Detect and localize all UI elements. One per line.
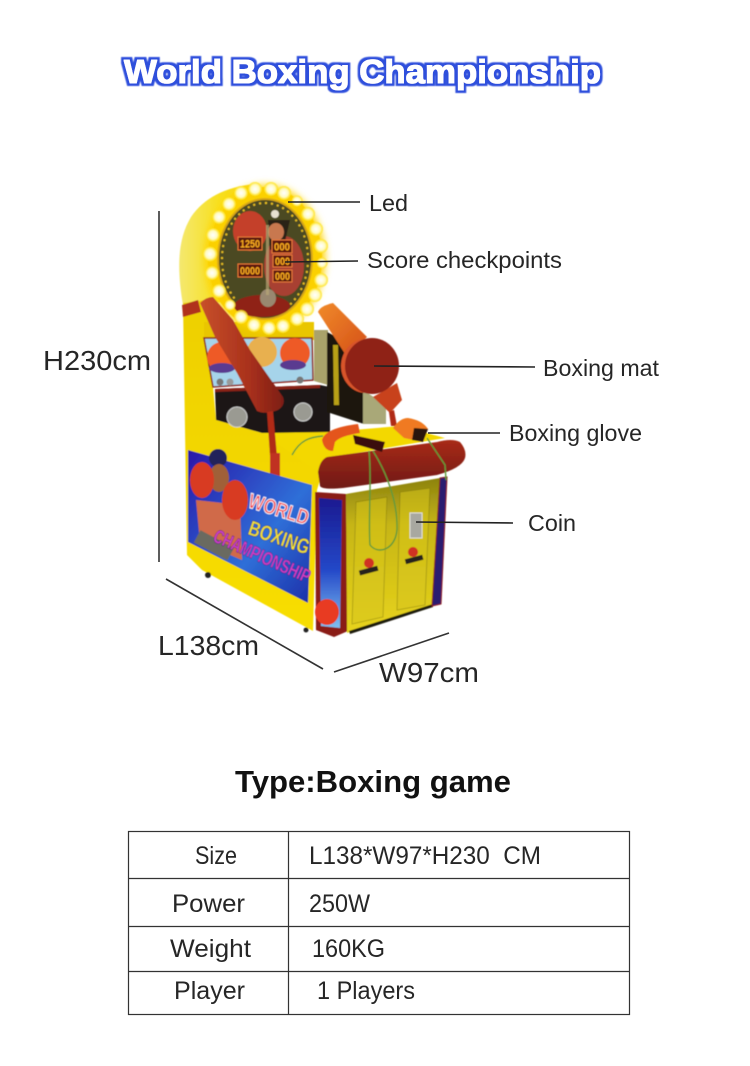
- mesh and dark post: [314, 330, 386, 424]
- light blue screen panel: [204, 337, 313, 387]
- banner wordmark: BOXING: [245, 517, 312, 559]
- right boxing glove: [393, 418, 428, 442]
- banner wordmark: CHAMPIONSHIP: [210, 526, 314, 588]
- row: power: [172, 890, 370, 918]
- green cords: [292, 436, 446, 550]
- upper panel behind screen: [204, 322, 314, 340]
- length dimension line: [166, 579, 323, 669]
- type heading: Type:Boxing game: [235, 764, 511, 799]
- score displays: 000: [275, 271, 290, 283]
- score displays: 000: [275, 256, 290, 268]
- counter top: [262, 426, 445, 472]
- width dimension line: [334, 633, 449, 672]
- row: weight: [170, 935, 385, 963]
- red side bracket: [182, 300, 201, 317]
- pirate boxer: [190, 449, 248, 560]
- length label: L138cm: [158, 630, 259, 661]
- row: player: 1 Players: [317, 977, 415, 1005]
- callout: Boxing glove: Boxing glove: [509, 420, 642, 446]
- left boxing glove: [322, 424, 385, 452]
- LED ring with dial: [202, 182, 328, 335]
- corner column: [315, 492, 348, 637]
- callout: Coin: Coin: [528, 510, 576, 536]
- height label: H230cm: [43, 345, 151, 376]
- boxing mat pad: [341, 338, 399, 394]
- ring glow: [205, 185, 325, 331]
- specification table: [128, 832, 630, 1014]
- banner wordmark: WORLD: [246, 490, 312, 530]
- door emblems: [364, 558, 374, 568]
- score displays: 1250: [240, 238, 260, 250]
- height dimension line: [158, 211, 160, 562]
- row: size: Size: [195, 842, 237, 870]
- LED bulbs: [202, 182, 328, 335]
- score displays: 0000: [240, 266, 260, 278]
- row: size: [195, 842, 541, 870]
- banner artwork: [188, 449, 314, 603]
- callout: Score checkpoints: Score checkpoints: [367, 247, 562, 273]
- row: weight: Weight: [170, 935, 251, 963]
- callout: Led: Led: [369, 190, 408, 216]
- row: weight: 160KG: [312, 935, 385, 963]
- score displays: 000: [274, 242, 290, 254]
- door panel: [346, 478, 440, 634]
- padded cushion: [318, 440, 465, 489]
- cabinet side body: [183, 300, 332, 631]
- callout: Boxing mat: Boxing mat: [543, 355, 660, 381]
- row: power: 250W: [309, 890, 370, 918]
- width label: W97cm: [379, 657, 479, 688]
- cabinet wheels: [205, 572, 308, 632]
- score displays: [238, 237, 292, 283]
- coin slot: [410, 513, 422, 538]
- row: size: L138*W97*H230 CM: [309, 842, 541, 870]
- title: World Boxing Championship: [124, 53, 601, 90]
- upper right arm: [318, 303, 367, 357]
- row: power: Power: [172, 890, 245, 918]
- black control panel: [215, 385, 330, 436]
- arcade machine photo: [179, 182, 465, 637]
- dial face: [218, 199, 312, 319]
- rear drum housing: [179, 184, 265, 305]
- lower right arm: [373, 383, 402, 413]
- left punching arm: [200, 297, 284, 486]
- row: player: [174, 977, 415, 1005]
- row: player: Player: [174, 977, 245, 1005]
- callout: Led: [288, 190, 408, 216]
- banner wordmark: [210, 490, 314, 588]
- right edge strip: [432, 477, 447, 606]
